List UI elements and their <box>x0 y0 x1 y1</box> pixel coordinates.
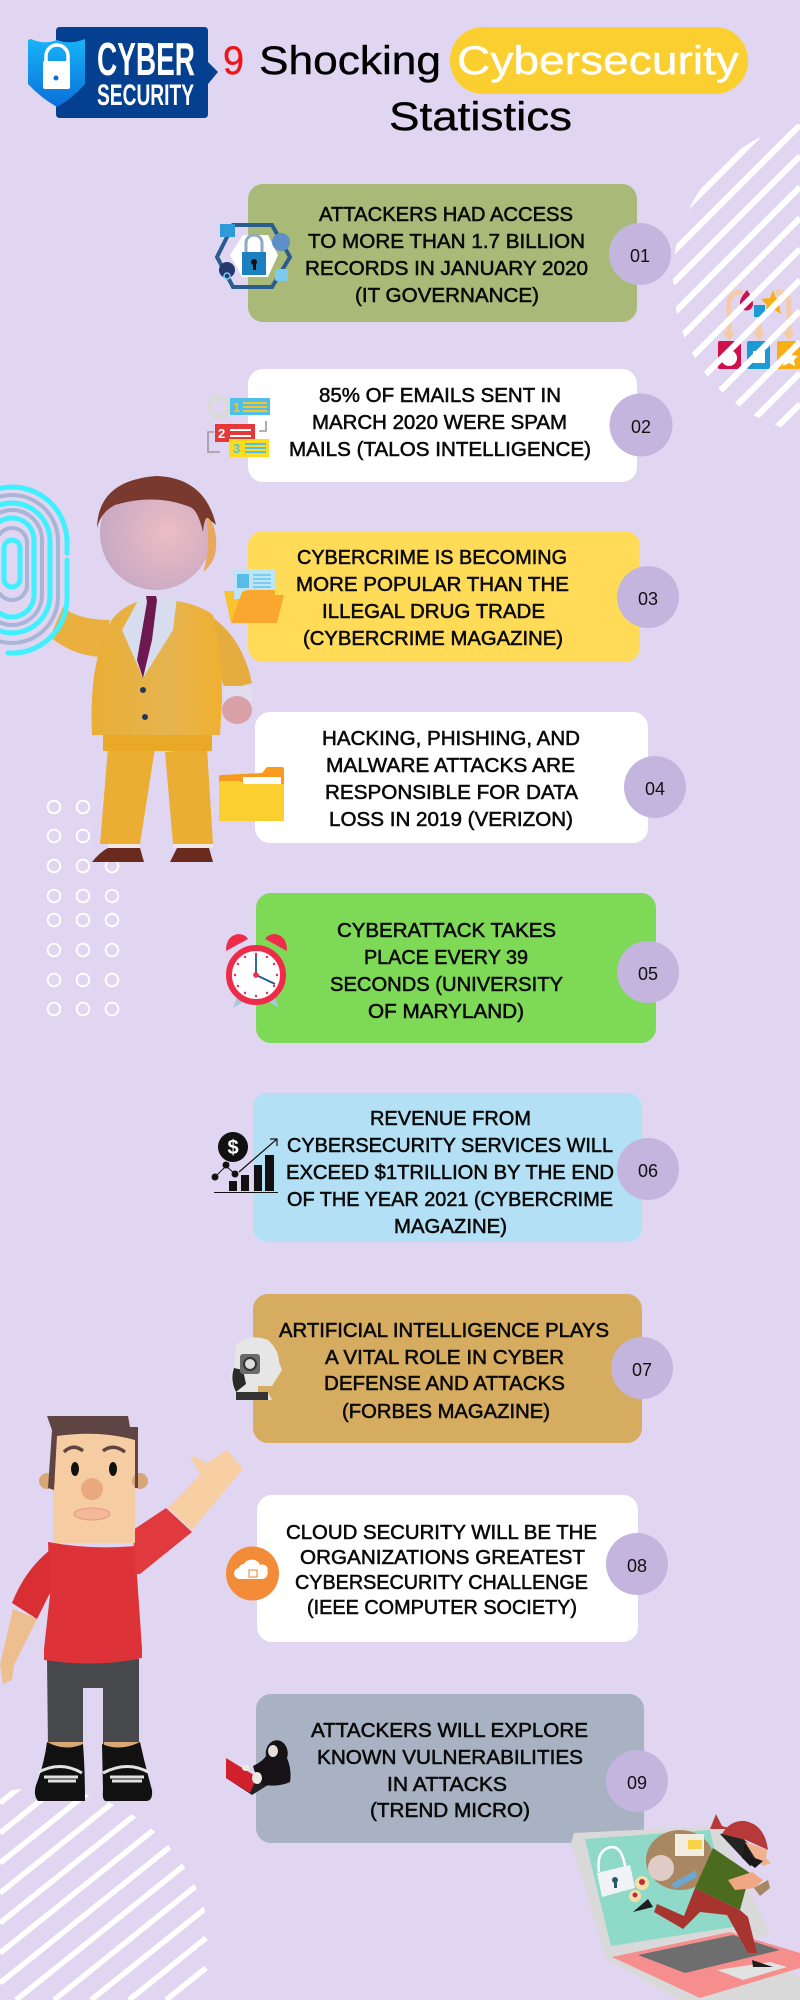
number 08: 08 <box>627 1556 647 1576</box>
stat 04 text: HACKING, PHISHING, AND <box>322 728 580 750</box>
stat 09 text: ATTACKERS WILL EXPLORE <box>311 1720 588 1742</box>
number 05: 05 <box>638 964 658 984</box>
number 01 <box>609 223 671 285</box>
stripes: bottom left <box>0 1789 208 2000</box>
stat 04 text: RESPONSIBLE FOR DATA <box>325 782 579 804</box>
number 07: 07 <box>632 1360 652 1380</box>
keyboard and trackpad <box>638 1935 780 1973</box>
stat 01 text: ATTACKERS HAD ACCESS <box>319 204 573 226</box>
title: Statistics <box>389 95 572 139</box>
icon: open folder <box>224 569 284 623</box>
title <box>223 27 748 139</box>
shirt and tie <box>122 597 177 678</box>
icon: numbered list: 1 <box>233 400 240 415</box>
stat 03 text: (CYBERCRIME MAGAZINE) <box>303 628 563 650</box>
shirt <box>695 1848 750 1910</box>
loot sack <box>646 1830 714 1890</box>
stat 07 text: A VITAL ROLE IN CYBER <box>325 1347 564 1369</box>
icon: numbered list <box>208 398 270 457</box>
stat 07 text: DEFENSE AND ATTACKS <box>324 1373 565 1395</box>
number 04: 04 <box>645 779 665 799</box>
stat 05 text: SECONDS (UNIVERSITY <box>330 974 563 996</box>
icon: numbered list: 3 <box>233 441 240 456</box>
icon: hierarchy cards top right <box>718 290 800 369</box>
stat 04 text: MALWARE ATTACKS ARE <box>326 755 575 777</box>
stat 02 text: MARCH 2020 WERE SPAM <box>312 412 567 434</box>
panel: stat 06 <box>253 1093 642 1242</box>
stripes: top right <box>673 124 800 427</box>
eyes and brows <box>71 1462 79 1476</box>
stat 06 text: REVENUE FROM <box>370 1108 531 1130</box>
laptop screen <box>585 1830 733 1946</box>
stat 07 text: (FORBES MAGAZINE) <box>342 1401 550 1423</box>
panel: stat 05 <box>256 893 656 1043</box>
number 09: 09 <box>627 1773 647 1793</box>
stat 07 text: ARTIFICIAL INTELLIGENCE PLAYS <box>279 1320 609 1342</box>
trousers <box>654 1888 757 1953</box>
stat 03 text <box>296 547 569 650</box>
number 02 <box>610 394 672 456</box>
stat 05 text: OF MARYLAND) <box>368 1001 524 1023</box>
icon: hacker with laptop <box>226 1740 291 1795</box>
number 08 <box>606 1533 668 1595</box>
title: 9 <box>223 39 244 83</box>
title: Shocking <box>259 39 441 83</box>
stat 09 text: (TREND MICRO) <box>370 1800 530 1822</box>
keys <box>635 1876 649 1890</box>
arm and hand <box>728 1872 763 1890</box>
stat 01 text <box>305 204 588 307</box>
illustration: man in yellow suit <box>50 476 252 862</box>
trousers <box>47 1659 139 1752</box>
stat 04 text <box>322 728 580 831</box>
head <box>100 476 212 590</box>
trousers <box>100 748 213 844</box>
number 03 <box>617 566 679 628</box>
hair <box>47 1416 138 1490</box>
stat 01 text: RECORDS IN JANUARY 2020 <box>305 258 588 280</box>
icon: robot head <box>231 1337 282 1400</box>
panel: stat 04 <box>255 712 648 843</box>
laptop screen frame <box>571 1826 770 1965</box>
open padlock <box>599 1847 625 1872</box>
cuff and hand <box>224 686 252 702</box>
shirt <box>12 1508 192 1664</box>
stat 02 text: 85% OF EMAILS SENT IN <box>319 385 561 407</box>
stat 05 text: CYBERATTACK TAKES <box>337 920 556 942</box>
number 04 <box>624 756 686 818</box>
stat 07 text <box>279 1320 609 1423</box>
stat 03 text: ILLEGAL DRUG TRADE <box>322 601 545 623</box>
stat 08 text: (IEEE COMPUTER SOCIETY) <box>307 1597 577 1619</box>
left arm <box>0 1609 37 1684</box>
shoes <box>92 848 213 862</box>
right arm <box>190 605 252 690</box>
icon: alarm clock <box>226 934 287 1008</box>
panel: stat 02 <box>248 369 637 482</box>
title pill <box>450 27 748 94</box>
laptop base edge <box>607 1940 800 2000</box>
title: Cybersecurity <box>457 39 739 83</box>
number 05 <box>617 941 679 1003</box>
face <box>53 1432 135 1543</box>
panel: stat 08 <box>257 1495 638 1642</box>
stat 02 text <box>289 385 591 461</box>
panel: stat 07 <box>253 1294 642 1443</box>
stat 03 text: CYBERCRIME IS BECOMING <box>297 547 567 569</box>
logo: cyber security: CYBER <box>97 33 195 85</box>
number 07 <box>611 1337 673 1399</box>
stat 09 text: KNOWN VULNERABILITIES <box>317 1747 583 1769</box>
stat 06 text: CYBERSECURITY SERVICES WILL <box>287 1135 613 1157</box>
panel: stat 09 <box>256 1694 644 1843</box>
stat 01 text: TO MORE THAN 1.7 BILLION <box>308 231 585 253</box>
illustration: thief leaping from laptop <box>571 1814 800 2000</box>
stat 03 text: MORE POPULAR THAN THE <box>296 574 569 596</box>
icon: numbered list: 2 <box>218 426 225 441</box>
icon: cloud lock <box>226 1546 279 1600</box>
nose and mouth <box>81 1478 103 1500</box>
stat 06 text: OF THE YEAR 2021 (CYBERCRIME <box>287 1189 613 1211</box>
stat 08 text: CYBERSECURITY CHALLENGE <box>295 1572 588 1594</box>
laptop base <box>612 1932 800 1998</box>
decorative dots <box>48 801 118 1015</box>
icon: revenue chart: $ <box>227 1137 239 1159</box>
stat 06 text: MAGAZINE) <box>394 1216 507 1238</box>
icon: revenue chart <box>212 1132 278 1192</box>
icon: hexagon lock <box>217 224 290 287</box>
stat 08 text: CLOUD SECURITY WILL BE THE <box>286 1522 597 1544</box>
right arm <box>168 1450 243 1530</box>
number 06: 06 <box>638 1161 658 1181</box>
logo: cyber security: SECURITY <box>97 79 194 112</box>
ankles <box>47 1742 140 1755</box>
shoes <box>633 1899 773 1967</box>
laces <box>37 1766 150 1781</box>
stat 05 text <box>330 920 563 1023</box>
number 06 <box>617 1138 679 1200</box>
number 03: 03 <box>638 589 658 609</box>
number 02: 02 <box>631 417 651 437</box>
number 01: 01 <box>630 246 650 266</box>
stat 02 text: MAILS (TALOS INTELLIGENCE) <box>289 439 591 461</box>
panel: stat 01 <box>248 184 637 322</box>
stat 08 text <box>286 1522 597 1619</box>
icon: closed folder <box>219 767 284 821</box>
stat 06 text <box>286 1108 614 1238</box>
head <box>720 1833 763 1866</box>
stat 09 text <box>311 1720 588 1822</box>
number 09 <box>606 1750 668 1812</box>
stat 09 text: IN ATTACKS <box>387 1774 507 1796</box>
illustration: man in red shirt <box>0 1416 243 1801</box>
shoes <box>35 1742 152 1801</box>
stat 05 text: PLACE EVERY 39 <box>364 947 528 969</box>
left arm <box>50 607 110 657</box>
stat 01 text: (IT GOVERNANCE) <box>355 285 539 307</box>
panel: stat 03 <box>248 531 640 662</box>
icon: fingerprint <box>0 487 67 653</box>
stat 06 text: EXCEED $1TRILLION BY THE END <box>286 1162 614 1184</box>
logo: cyber security <box>28 27 218 118</box>
stat 08 text: ORGANIZATIONS GREATEST <box>300 1547 585 1569</box>
stat 04 text: LOSS IN 2019 (VERIZON) <box>329 809 573 831</box>
jacket <box>92 601 222 735</box>
